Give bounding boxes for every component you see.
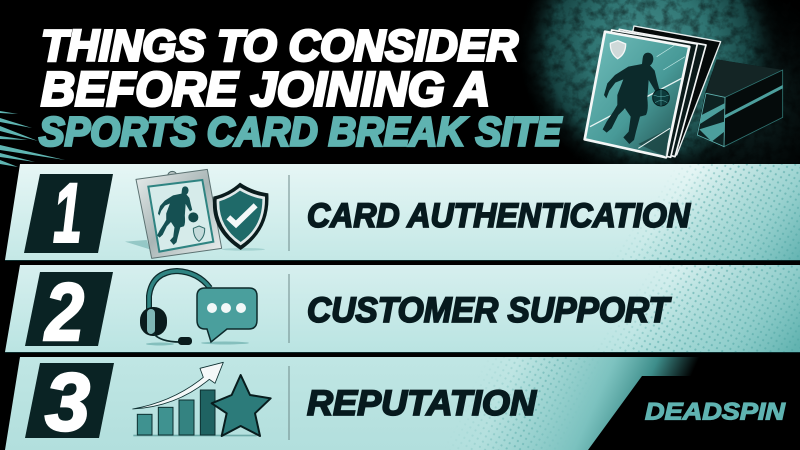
logo panel: Deadspin: DEADSPIN <box>645 398 786 426</box>
icon: card box <box>697 59 783 147</box>
arrow <box>133 362 223 409</box>
icon: basketball <box>653 89 669 106</box>
illustration: card stack and box <box>585 26 783 157</box>
panel: row 3 <box>5 357 697 450</box>
icon: authenticated card and shield <box>125 169 268 258</box>
decorative speed streaks <box>0 111 65 167</box>
title line 2: BEFORE JOINING A <box>41 64 490 116</box>
label: customer support: CUSTOMER SUPPORT <box>307 291 671 330</box>
number box 1: 1 <box>53 166 82 260</box>
divider <box>288 274 290 343</box>
icon: star <box>212 375 271 436</box>
number box 2: 2 <box>43 267 84 358</box>
headset <box>140 271 210 345</box>
number box 3 <box>25 357 114 448</box>
title <box>39 22 563 154</box>
title line 1: THINGS TO CONSIDER <box>41 22 518 70</box>
logo panel: Deadspin <box>588 376 800 450</box>
divider <box>288 366 290 440</box>
shield with check <box>213 183 268 250</box>
number box 3: 3 <box>45 357 90 448</box>
label: card authentication: CARD AUTHENTICATION <box>307 197 691 235</box>
bar chart <box>137 390 215 435</box>
divider <box>288 175 290 251</box>
player silhouette <box>603 53 659 144</box>
label: reputation: REPUTATION <box>307 384 537 423</box>
title line 3: SPORTS CARD BREAK SITE <box>39 108 563 154</box>
icon: stacked cards <box>585 26 721 157</box>
panel: row 2 <box>5 265 800 358</box>
icon: headset and chat bubble <box>140 271 257 346</box>
icon: rising bars and star <box>133 362 271 436</box>
panel: row 1 <box>5 164 800 261</box>
icon: small shield <box>610 41 626 59</box>
number box 2 <box>25 267 113 358</box>
slab holder <box>136 169 222 258</box>
number box 1 <box>24 166 113 260</box>
chat bubble <box>197 288 257 342</box>
